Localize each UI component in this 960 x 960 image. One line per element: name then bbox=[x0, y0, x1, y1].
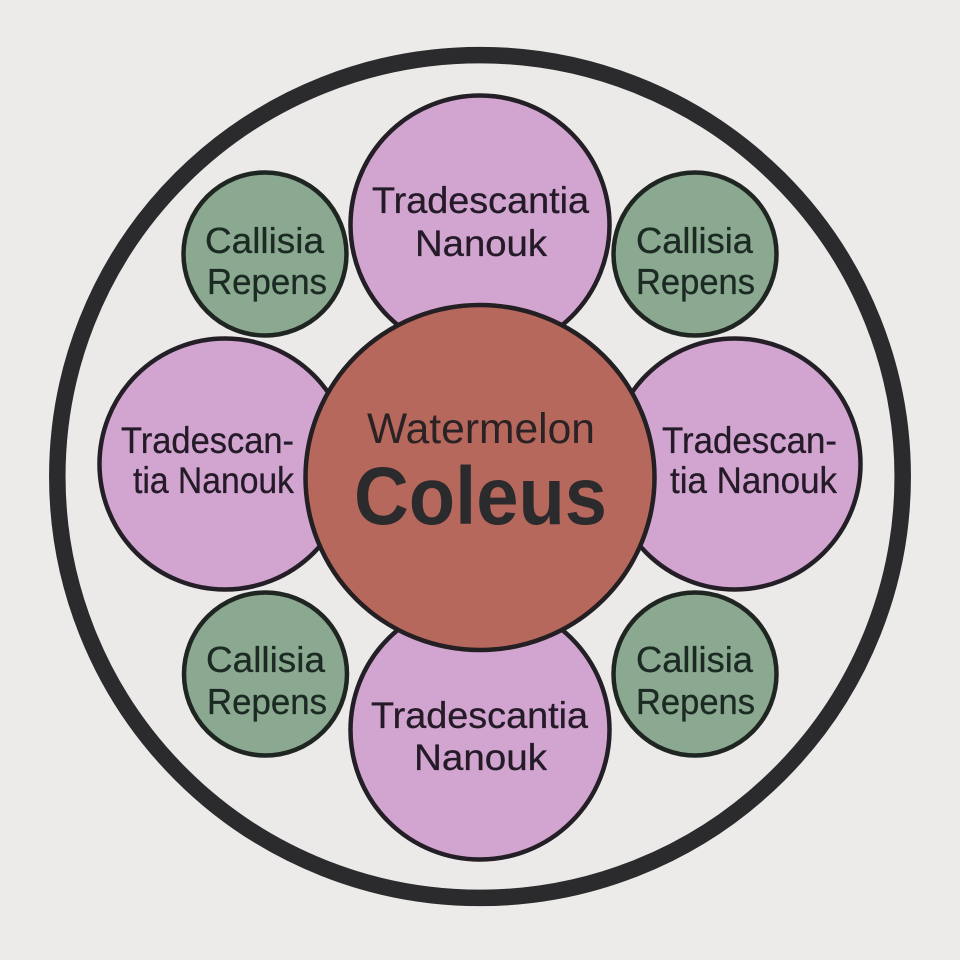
circle: top Tradescantia Nanouk bbox=[350, 96, 610, 354]
circle: left Tradescantia Nanouk bbox=[100, 338, 350, 590]
circle: top-right Callisia Repens: Repens bbox=[636, 261, 755, 302]
center circle: Watermelon Coleus: Coleus bbox=[354, 451, 607, 542]
circle: top-left Callisia Repens: Repens bbox=[207, 261, 327, 302]
circle: bottom-right Callisia Repens: Callisia bbox=[636, 639, 754, 680]
circle: top-right Callisia Repens bbox=[614, 172, 776, 336]
circle: top-right Callisia Repens: Callisia bbox=[636, 220, 754, 261]
circle: top Tradescantia Nanouk: Tradescantia bbox=[372, 180, 589, 221]
circle: bottom-right Callisia Repens bbox=[614, 592, 776, 756]
circle: bottom-left Callisia Repens: Repens bbox=[207, 681, 327, 722]
circle: bottom Tradescantia Nanouk: Nanouk bbox=[414, 737, 548, 778]
circle: bottom-left Callisia Repens: Callisia bbox=[206, 639, 326, 680]
circle: top-left Callisia Repens bbox=[184, 172, 346, 336]
circle: right Tradescantia Nanouk bbox=[610, 338, 860, 590]
outer boundary ring bbox=[57, 55, 903, 898]
circle: top Tradescantia Nanouk: Nanouk bbox=[415, 223, 548, 264]
center circle: Watermelon Coleus bbox=[306, 305, 654, 650]
circle: left Tradescantia Nanouk: tia Nanouk bbox=[133, 460, 294, 501]
circle: bottom-right Callisia Repens: Repens bbox=[636, 681, 755, 722]
circle: bottom Tradescantia Nanouk: Tradescantia bbox=[371, 695, 588, 736]
circle: top-left Callisia Repens: Callisia bbox=[205, 220, 325, 261]
center circle: Watermelon Coleus: Watermelon bbox=[367, 405, 595, 453]
circle: right Tradescantia Nanouk: tia Nanouk bbox=[670, 460, 837, 501]
circle: right Tradescantia Nanouk: Tradescan- bbox=[662, 420, 837, 461]
circle: left Tradescantia Nanouk: Tradescan- bbox=[121, 420, 294, 461]
circle: bottom Tradescantia Nanouk bbox=[350, 600, 610, 860]
circle: bottom-left Callisia Repens bbox=[184, 592, 347, 756]
